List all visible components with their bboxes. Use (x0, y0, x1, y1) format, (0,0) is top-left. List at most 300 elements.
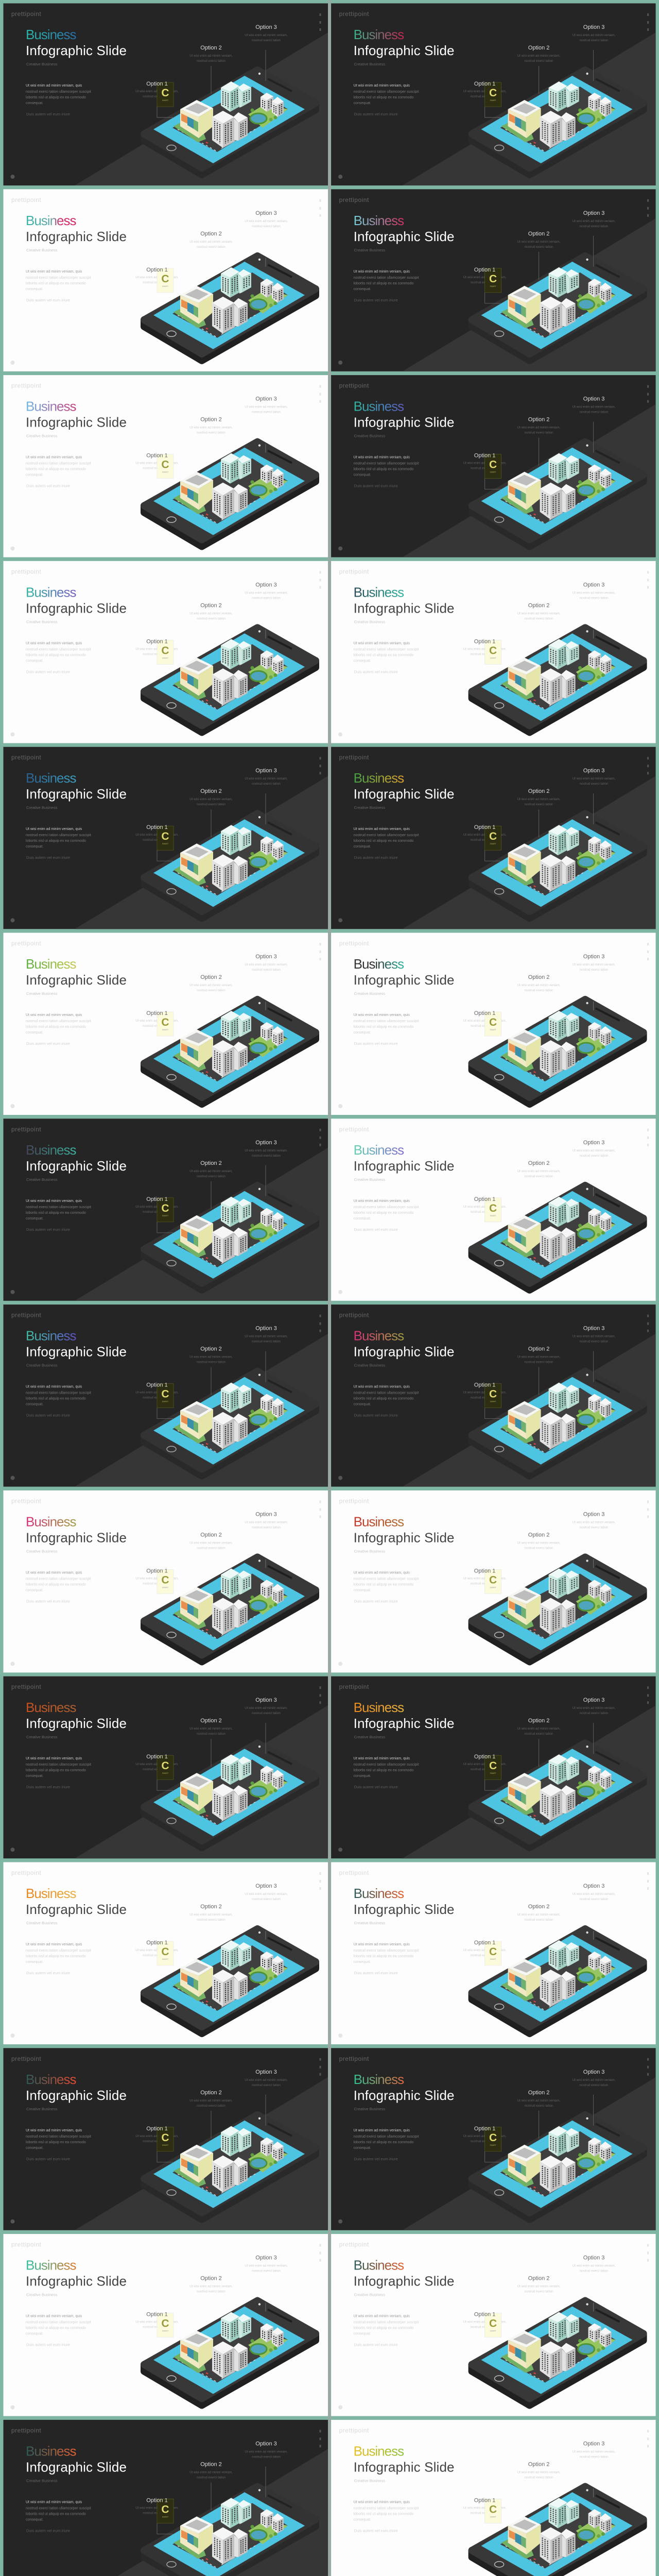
note: Duis autem vel eum iriure (354, 1041, 398, 1046)
body text: nostrud exerci tation ullamcorper suscipit (354, 1392, 419, 1395)
body text: consequat. (26, 659, 43, 663)
badge (485, 2313, 501, 2337)
option 1 title: Option 1 (146, 2312, 168, 2318)
option 2: nostrud exerci tation (197, 1732, 226, 1736)
background (3, 1118, 328, 1301)
body text: consequat. (354, 1774, 371, 1778)
option 2: Option 2 (528, 788, 549, 794)
body text: nostrud exerci tation ullamcorper suscipit (26, 1392, 91, 1395)
option 3: nostrud exerci tation (252, 782, 281, 786)
option 3: Ut wisi enim ad minim veniam, (573, 405, 616, 409)
badge (485, 1941, 501, 1965)
subtitle: Creative Business (26, 2107, 58, 2111)
option 3: nostrud exerci tation (252, 2083, 281, 2087)
option 3: nostrud exerci tation (580, 1526, 609, 1529)
option 3 (573, 24, 616, 42)
body text: nostrud exerci tation ullamcorper suscipit (26, 1949, 91, 1953)
option 1 text (463, 2506, 507, 2515)
body text: nostrud exerci tation ullamcorper suscipit (354, 2135, 419, 2139)
option 1 text: Ut wisi enim ad minim veniam, (463, 2134, 507, 2138)
option 3: Ut wisi enim ad minim veniam, (573, 2450, 616, 2453)
badge (157, 1384, 174, 1408)
option 3 (573, 396, 616, 414)
body text: nostrud exerci tation ullamcorper suscipit (354, 2321, 419, 2325)
option 2: Option 2 (200, 1532, 222, 1538)
option 3: Ut wisi enim ad minim veniam, (245, 33, 288, 37)
body text: lobortis nisl ut aliquip ex ea commodo (354, 1583, 413, 1586)
heading: Infographic Slide (26, 1530, 127, 1545)
option 2: Ut wisi enim ad minim veniam, (189, 2099, 233, 2103)
option 2: Option 2 (528, 2276, 549, 2282)
option 1 text (135, 2320, 179, 2329)
heading: Infographic Slide (354, 1158, 455, 1174)
option 3: Ut wisi enim ad minim veniam, (573, 1706, 616, 1710)
subtitle: Creative Business (354, 248, 385, 252)
option 1 text: nostrud exerci tation (471, 281, 499, 284)
option 3: Option 3 (583, 210, 604, 216)
note: Duis autem vel eum iriure (354, 1599, 398, 1603)
option 1 text: nostrud exerci tation (143, 1024, 171, 1028)
body text: lobortis nisl ut aliquip ex ea commodo (26, 839, 86, 843)
option 3 (245, 2441, 288, 2459)
option 1 title: Option 1 (146, 1568, 168, 1574)
badge: SMART (490, 1958, 497, 1960)
option 2: Option 2 (528, 1904, 549, 1910)
body text: nostrud exerci tation ullamcorper suscipit (26, 834, 91, 837)
background (3, 1304, 328, 1487)
option 1 text (135, 1762, 179, 1771)
option 3: nostrud exerci tation (580, 2269, 609, 2273)
option 1 text (135, 462, 179, 470)
option 2: Ut wisi enim ad minim veniam, (189, 54, 233, 58)
heading accent: Business (26, 2258, 76, 2273)
option 1 text: nostrud exerci tation (143, 838, 171, 842)
body text: consequat. (354, 2146, 371, 2150)
heading accent: Business (26, 2443, 76, 2459)
phone illustration (144, 1165, 316, 1290)
note: Duis autem vel eum iriure (354, 2528, 398, 2533)
option 1 text: nostrud exerci tation (471, 652, 499, 656)
background (3, 933, 328, 1115)
body text: lobortis nisl ut aliquip ex ea commodo (26, 1397, 86, 1401)
option 2: Ut wisi enim ad minim veniam, (189, 1913, 233, 1917)
body text: Ut wisi enim ad minim veniam, quis (26, 1013, 82, 1017)
body text: lobortis nisl ut aliquip ex ea commodo (354, 1397, 413, 1401)
body text: lobortis nisl ut aliquip ex ea commodo (354, 1955, 413, 1958)
option 3 (245, 210, 288, 228)
option 1 text (135, 2506, 179, 2515)
body text: lobortis nisl ut aliquip ex ea commodo (354, 1211, 413, 1215)
option 3: Ut wisi enim ad minim veniam, (245, 963, 288, 967)
slide 1 dark (3, 3, 328, 185)
column gap (328, 0, 331, 2576)
body text: lobortis nisl ut aliquip ex ea commodo (354, 282, 413, 285)
heading accent: Business (26, 1700, 76, 1715)
heading accent: Business (26, 1328, 76, 1344)
body text: Ut wisi enim ad minim veniam, quis (354, 1013, 410, 1017)
badge: SMART (162, 285, 169, 287)
option 2 (517, 602, 561, 620)
heading accent: Business (354, 1142, 404, 1158)
note: Duis autem vel eum iriure (26, 1599, 70, 1603)
heading accent: Business (26, 770, 76, 786)
option 1 text (135, 2134, 179, 2143)
option 3: Option 3 (255, 396, 277, 402)
option 1 title: Option 1 (146, 81, 168, 87)
slide 5 light (3, 375, 328, 557)
body text: Ut wisi enim ad minim veniam, quis (26, 1199, 82, 1203)
option 1 text: Ut wisi enim ad minim veniam, (135, 2506, 179, 2510)
phone illustration (144, 2301, 316, 2405)
option 1 text (463, 1948, 507, 1957)
heading: Infographic Slide (26, 229, 127, 244)
logo: prettipoint (11, 2427, 41, 2434)
option 2: Option 2 (200, 974, 222, 980)
option 2: Ut wisi enim ad minim veniam, (517, 798, 561, 801)
background (331, 2048, 656, 2230)
badge: C (161, 1016, 169, 1028)
option 1 text: Ut wisi enim ad minim veniam, (135, 462, 179, 465)
option 3: Ut wisi enim ad minim veniam, (573, 591, 616, 595)
badge (157, 1941, 174, 1965)
note: Duis autem vel eum iriure (26, 1413, 70, 1418)
badge: C (489, 1946, 497, 1958)
heading: Infographic Slide (354, 2088, 455, 2103)
badge (157, 2313, 174, 2337)
phone illustration (144, 442, 316, 547)
option 3: nostrud exerci tation (252, 596, 281, 600)
heading accent: Business (354, 770, 404, 786)
heading accent: Business (26, 956, 76, 972)
option 1 title: Option 1 (146, 1754, 168, 1760)
body text: consequat. (354, 845, 371, 849)
subtitle: Creative Business (354, 2478, 385, 2483)
slide 15 dark (3, 1304, 328, 1487)
option 3 (245, 24, 288, 42)
body text: consequat. (26, 1588, 43, 1592)
option 1 text: nostrud exerci tation (471, 1396, 499, 1400)
option 3: Option 3 (583, 1140, 604, 1146)
logo: prettipoint (339, 1312, 369, 1319)
option 1 text: Ut wisi enim ad minim veniam, (463, 1019, 507, 1023)
body text: nostrud exerci tation ullamcorper suscipit (354, 1763, 419, 1767)
body text: consequat. (354, 1217, 371, 1221)
option 1 title: Option 1 (146, 1196, 168, 1202)
option 3: Ut wisi enim ad minim veniam, (573, 33, 616, 37)
body text: lobortis nisl ut aliquip ex ea commodo (354, 96, 413, 99)
option 1 text (463, 1391, 507, 1400)
logo: prettipoint (11, 568, 41, 575)
note: Duis autem vel eum iriure (26, 1971, 70, 1975)
background (3, 2048, 328, 2230)
phone illustration (144, 2466, 316, 2576)
option 2: nostrud exerci tation (525, 2290, 553, 2294)
body text: Ut wisi enim ad minim veniam, quis (26, 1943, 82, 1946)
option 1 text (135, 647, 179, 656)
option 3: Ut wisi enim ad minim veniam, (245, 777, 288, 781)
slide 20 dark (331, 1676, 656, 1858)
badge: SMART (490, 2330, 497, 2332)
option 2: nostrud exerci tation (197, 2476, 226, 2479)
body text: Ut wisi enim ad minim veniam, quis (26, 2129, 82, 2132)
badge: SMART (490, 1772, 497, 1774)
heading accent: Business (354, 213, 404, 228)
slide 14 light (331, 1118, 656, 1301)
body text: nostrud exerci tation ullamcorper suscipit (354, 2506, 419, 2510)
option 3: Option 3 (255, 1140, 277, 1146)
body text: lobortis nisl ut aliquip ex ea commodo (26, 1211, 86, 1215)
subtitle: Creative Business (354, 1549, 385, 1553)
option 2: nostrud exerci tation (525, 2104, 553, 2108)
option 3: Option 3 (583, 768, 604, 774)
background (3, 3, 328, 185)
option 2: nostrud exerci tation (525, 245, 553, 249)
badge (157, 2127, 174, 2151)
option 1 title: Option 1 (146, 638, 168, 645)
body text: lobortis nisl ut aliquip ex ea commodo (354, 1769, 413, 1772)
phone illustration (472, 1929, 644, 2033)
option 2 (517, 417, 561, 435)
option 2: nostrud exerci tation (525, 1361, 553, 1364)
badge (157, 82, 174, 107)
phone illustration (472, 628, 644, 732)
logo: prettipoint (339, 940, 369, 947)
option 3: nostrud exerci tation (580, 2083, 609, 2087)
body text: lobortis nisl ut aliquip ex ea commodo (26, 653, 86, 657)
badge: SMART (490, 99, 497, 101)
heading: Infographic Slide (26, 415, 127, 430)
option 3: nostrud exerci tation (252, 1711, 281, 1715)
badge: C (489, 645, 497, 656)
logo: prettipoint (11, 2241, 41, 2248)
subtitle: Creative Business (354, 619, 385, 624)
option 2: Ut wisi enim ad minim veniam, (189, 1727, 233, 1731)
logo: prettipoint (339, 1869, 369, 1876)
subtitle: Creative Business (354, 991, 385, 996)
option 1 text: Ut wisi enim ad minim veniam, (463, 833, 507, 837)
body text: nostrud exerci tation ullamcorper suscipit (354, 1949, 419, 1953)
badge: SMART (162, 1586, 169, 1588)
body text: lobortis nisl ut aliquip ex ea commodo (26, 2141, 86, 2144)
option 2: nostrud exerci tation (525, 617, 553, 620)
option 2: Ut wisi enim ad minim veniam, (189, 426, 233, 430)
phone illustration (472, 1557, 644, 1662)
option 3: Option 3 (583, 1326, 604, 1332)
option 3: Ut wisi enim ad minim veniam, (573, 1335, 616, 1338)
option 3: Option 3 (583, 2255, 604, 2261)
heading accent: Business (26, 1886, 76, 1901)
option 3 (573, 1883, 616, 1901)
option 1 title: Option 1 (146, 1382, 168, 1388)
body text: consequat. (354, 2332, 371, 2336)
note: Duis autem vel eum iriure (354, 855, 398, 860)
logo: prettipoint (339, 2427, 369, 2434)
note: Duis autem vel eum iriure (354, 2343, 398, 2347)
option 2 (189, 2090, 233, 2108)
option 3: nostrud exerci tation (580, 1154, 609, 1158)
heading: Infographic Slide (354, 1530, 455, 1545)
body text: nostrud exerci tation ullamcorper suscipit (26, 462, 91, 466)
badge: C (161, 1946, 169, 1958)
option 1 title: Option 1 (474, 1196, 495, 1202)
background (3, 1862, 328, 2044)
option 2 (189, 1904, 233, 1922)
body text: Ut wisi enim ad minim veniam, quis (26, 270, 82, 274)
background (331, 3, 656, 185)
logo: prettipoint (11, 1497, 41, 1504)
badge: C (489, 87, 497, 99)
heading accent: Business (26, 399, 76, 414)
subtitle: Creative Business (26, 619, 58, 624)
option 3: Option 3 (583, 396, 604, 402)
option 1 title: Option 1 (474, 453, 495, 459)
badge: C (489, 1388, 497, 1400)
note: Duis autem vel eum iriure (26, 2528, 70, 2533)
option 3 (573, 2441, 616, 2459)
option 1 text: Ut wisi enim ad minim veniam, (135, 2134, 179, 2138)
heading accent: Business (26, 213, 76, 228)
body text: consequat. (26, 1031, 43, 1035)
option 2: Ut wisi enim ad minim veniam, (517, 984, 561, 987)
body text: Ut wisi enim ad minim veniam, quis (26, 641, 82, 645)
option 1 title: Option 1 (146, 267, 168, 273)
option 2: Option 2 (528, 2461, 549, 2467)
phone illustration (472, 50, 644, 175)
option 2: nostrud exerci tation (525, 1175, 553, 1178)
slide 16 dark (331, 1304, 656, 1487)
subtitle: Creative Business (26, 62, 58, 66)
body text: consequat. (354, 287, 371, 291)
badge: SMART (490, 471, 497, 473)
subtitle: Creative Business (354, 1735, 385, 1739)
option 1 text (463, 833, 507, 842)
heading: Infographic Slide (354, 786, 455, 802)
slide 11 light (3, 933, 328, 1115)
option 3: nostrud exerci tation (580, 225, 609, 228)
option 2: nostrud exerci tation (197, 245, 226, 249)
option 3: Option 3 (255, 24, 277, 30)
heading accent: Business (354, 2443, 404, 2459)
badge: C (489, 459, 497, 471)
option 1 text: nostrud exerci tation (471, 2326, 499, 2329)
option 2: Ut wisi enim ad minim veniam, (189, 1170, 233, 1173)
body text: consequat. (26, 1774, 43, 1778)
logo: prettipoint (11, 10, 41, 18)
badge (157, 640, 174, 664)
option 2 (189, 1718, 233, 1736)
background (3, 1676, 328, 1858)
badge: C (161, 831, 169, 842)
body text: lobortis nisl ut aliquip ex ea commodo (26, 468, 86, 471)
option 1 text: nostrud exerci tation (471, 2140, 499, 2143)
badge: SMART (162, 99, 169, 101)
body text: Ut wisi enim ad minim veniam, quis (354, 1757, 410, 1760)
background (331, 1676, 656, 1858)
option 3 (573, 1697, 616, 1715)
body text: lobortis nisl ut aliquip ex ea commodo (26, 96, 86, 99)
option 3: Option 3 (255, 954, 277, 960)
phone illustration (144, 2095, 316, 2219)
option 2: nostrud exerci tation (525, 1546, 553, 1550)
note: Duis autem vel eum iriure (26, 1785, 70, 1789)
badge: SMART (490, 843, 497, 845)
option 3: Option 3 (255, 1511, 277, 1517)
option 2: Ut wisi enim ad minim veniam, (189, 798, 233, 801)
badge: C (161, 1388, 169, 1400)
option 1 text: Ut wisi enim ad minim veniam, (463, 90, 507, 93)
body text: lobortis nisl ut aliquip ex ea commodo (354, 839, 413, 843)
body text: nostrud exerci tation ullamcorper suscipit (26, 1577, 91, 1581)
badge (485, 1569, 501, 1594)
badge: C (489, 831, 497, 842)
body text: Ut wisi enim ad minim veniam, quis (354, 2315, 410, 2318)
option 3: Option 3 (583, 1883, 604, 1889)
note: Duis autem vel eum iriure (354, 2157, 398, 2161)
option 2: Ut wisi enim ad minim veniam, (517, 1355, 561, 1359)
option 1 text: Ut wisi enim ad minim veniam, (135, 1577, 179, 1580)
option 1 title: Option 1 (474, 2126, 495, 2132)
body text: nostrud exerci tation ullamcorper suscipit (354, 1577, 419, 1581)
option 3: nostrud exerci tation (252, 225, 281, 228)
option 1 text: nostrud exerci tation (471, 2511, 499, 2515)
badge: C (489, 2503, 497, 2515)
option 3 (245, 1697, 288, 1715)
heading: Infographic Slide (354, 43, 455, 58)
note: Duis autem vel eum iriure (354, 112, 398, 116)
option 2 (189, 788, 233, 806)
option 3 (245, 396, 288, 414)
option 1 title: Option 1 (474, 1010, 495, 1016)
heading: Infographic Slide (26, 786, 127, 802)
slide 4 dark (331, 189, 656, 371)
option 3 (245, 2069, 288, 2087)
option 2 (517, 788, 561, 806)
badge: C (489, 273, 497, 285)
body text: lobortis nisl ut aliquip ex ea commodo (26, 1955, 86, 1958)
option 2 (517, 1346, 561, 1364)
option 1 title: Option 1 (474, 638, 495, 645)
option 1 title: Option 1 (474, 2497, 495, 2503)
option 2: Option 2 (528, 974, 549, 980)
slide 2 dark (331, 3, 656, 185)
heading: Infographic Slide (26, 2274, 127, 2289)
logo: prettipoint (11, 1869, 41, 1876)
subtitle: Creative Business (26, 1177, 58, 1182)
body text: nostrud exerci tation ullamcorper suscipit (354, 834, 419, 837)
option 1 text: Ut wisi enim ad minim veniam, (135, 1019, 179, 1023)
option 3: Ut wisi enim ad minim veniam, (573, 2264, 616, 2268)
option 2: nostrud exerci tation (525, 1918, 553, 1922)
logo: prettipoint (339, 1683, 369, 1690)
option 3: Ut wisi enim ad minim veniam, (573, 1149, 616, 1153)
phone illustration (144, 50, 316, 175)
body text: Ut wisi enim ad minim veniam, quis (354, 1943, 410, 1946)
option 3: Option 3 (583, 2069, 604, 2075)
logo: prettipoint (339, 2055, 369, 2062)
badge: C (161, 1760, 169, 1772)
option 1 text (463, 1577, 507, 1585)
option 2: nostrud exerci tation (197, 617, 226, 620)
background (331, 1862, 656, 2044)
slide 26 light (331, 2234, 656, 2416)
body text: Ut wisi enim ad minim veniam, quis (26, 2315, 82, 2318)
body text: Ut wisi enim ad minim veniam, quis (354, 1199, 410, 1203)
body text: nostrud exerci tation ullamcorper suscipit (26, 90, 91, 94)
heading: Infographic Slide (354, 229, 455, 244)
body text: lobortis nisl ut aliquip ex ea commodo (354, 1025, 413, 1029)
body text: consequat. (354, 473, 371, 477)
body text: nostrud exerci tation ullamcorper suscipit (354, 276, 419, 280)
